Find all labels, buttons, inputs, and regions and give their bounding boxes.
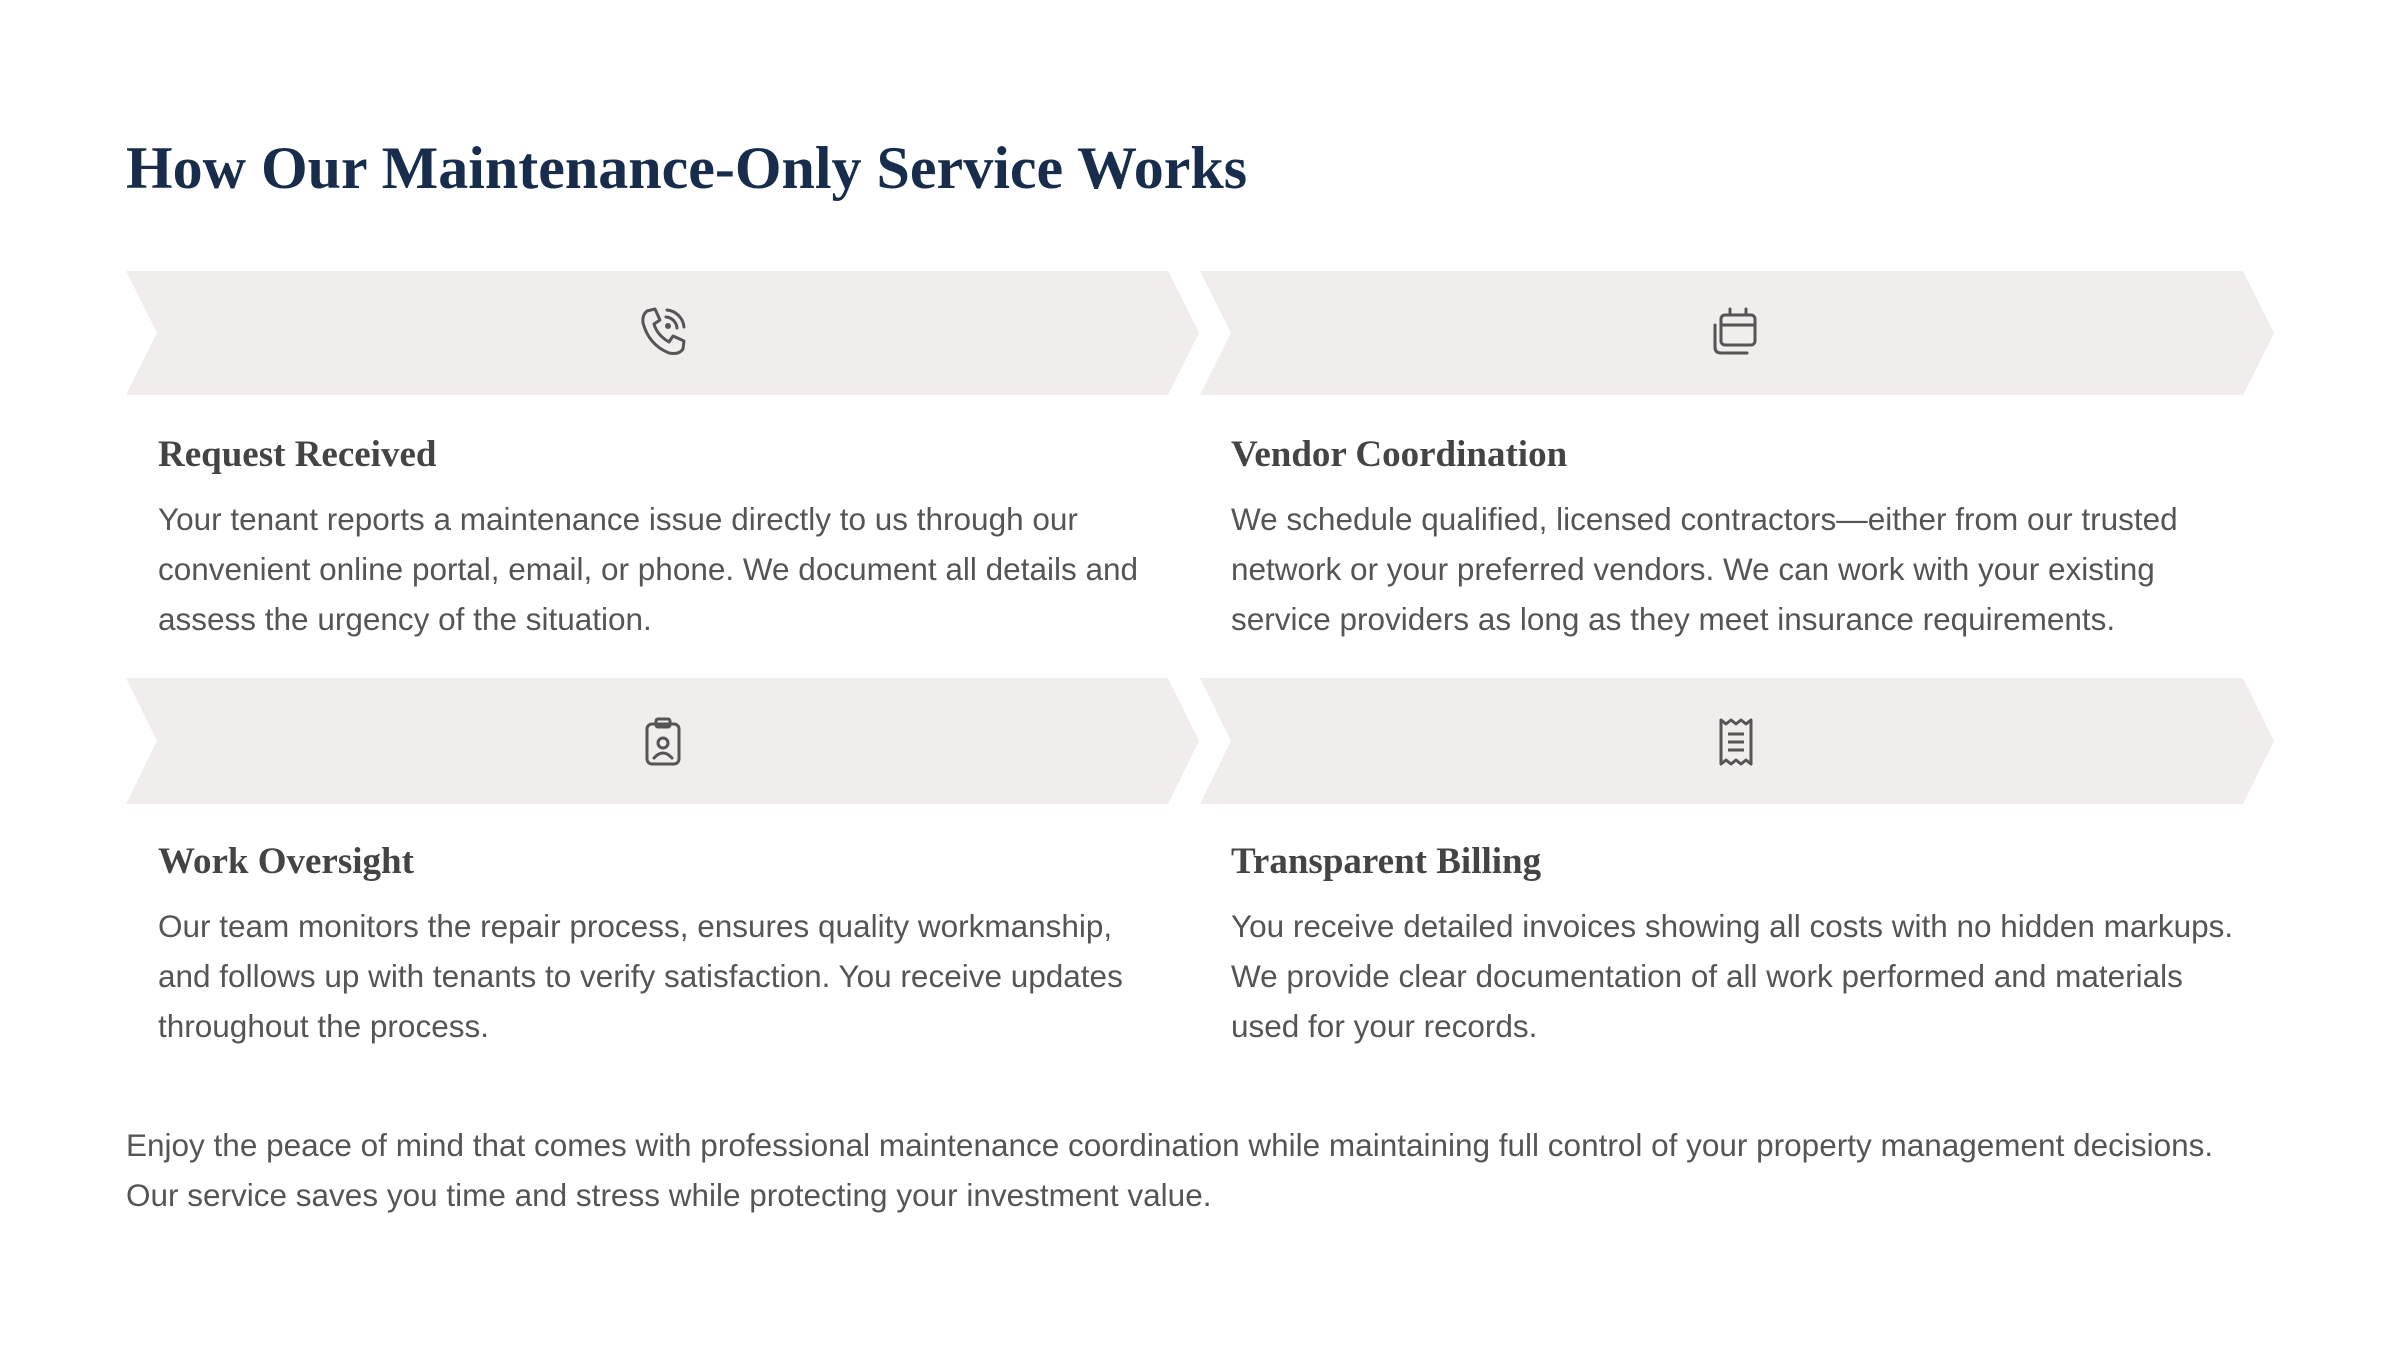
body: work oversight: Our team monitors the repair process, ensures quality workmanship, — [158, 908, 1112, 944]
body: request received — [158, 501, 1138, 637]
heading: request received: Request Received — [158, 434, 436, 475]
body: request received: Your tenant reports a maintenance issue directly to us through our — [158, 501, 1078, 537]
chevron: vendor coordination — [1200, 271, 2274, 395]
footer text: Our service saves you time and stress while protecting your investment value. — [126, 1177, 1211, 1213]
body: work oversight: and follows up with tenants to verify satisfaction. You receive updates — [158, 958, 1123, 994]
chevron: work oversight — [126, 678, 1199, 804]
chevron: transparent billing — [1200, 678, 2274, 804]
footer text: Enjoy the peace of mind that comes with professional maintenance coordination while maintaining full control of your property management decisions. — [126, 1127, 2213, 1163]
body: request received: assess the urgency of the situation. — [158, 601, 652, 637]
heading: vendor coordination: Vendor Coordination — [1231, 434, 1567, 475]
body: vendor coordination: service providers as long as they meet insurance requirements. — [1231, 601, 2115, 637]
body: transparent billing: We provide clear documentation of all work performed and materials — [1231, 958, 2183, 994]
title: How Our Maintenance-Only Service Works — [126, 135, 1247, 201]
icon: calendar — [1715, 309, 1755, 353]
body: transparent billing: You receive detailed invoices showing all costs with no hidden markups. — [1231, 908, 2233, 944]
body: vendor coordination — [1231, 501, 2178, 637]
icon: receipt — [1721, 720, 1751, 764]
body: work oversight — [158, 908, 1123, 1044]
body: request received: convenient online portal, email, or phone. We document all details and — [158, 551, 1138, 587]
heading: work oversight: Work Oversight — [158, 841, 414, 882]
footer text — [126, 1127, 2213, 1213]
body: work oversight: throughout the process. — [158, 1008, 489, 1044]
body: vendor coordination: network or your preferred vendors. We can work with your existing — [1231, 551, 2155, 587]
icon: clipboard person — [647, 719, 679, 764]
body: transparent billing: used for your records. — [1231, 1008, 1537, 1044]
step 2 text — [1231, 434, 2178, 637]
body: transparent billing — [1231, 908, 2233, 1044]
chevron: request received — [126, 271, 1199, 395]
step 4 text — [1231, 841, 2233, 1044]
heading: transparent billing: Transparent Billing — [1231, 841, 1541, 882]
step 3 text — [158, 841, 1123, 1044]
icon: phone — [643, 309, 684, 354]
step 1 text — [158, 434, 1138, 637]
body: vendor coordination: We schedule qualified, licensed contractors—either from our trusted — [1231, 501, 2178, 537]
